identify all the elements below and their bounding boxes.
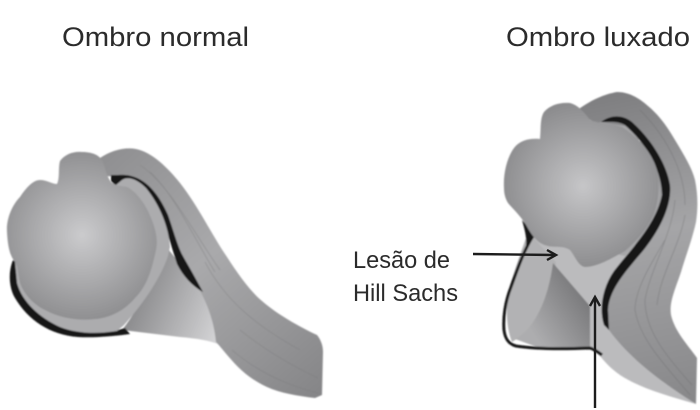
humeral head bbox=[7, 152, 157, 320]
glenoid ring bbox=[15, 178, 170, 333]
scapular wedge bbox=[122, 245, 232, 344]
humeral head bbox=[504, 103, 659, 267]
black outline bbox=[504, 236, 602, 355]
label: Lesão de Hill Sachs: Lesão de bbox=[353, 247, 450, 274]
illustration: normal shoulder bbox=[7, 148, 323, 398]
black joint line, upper bbox=[111, 175, 203, 292]
tendon fibres bbox=[635, 110, 692, 395]
illustration: dislocated shoulder bbox=[504, 92, 697, 404]
label: Lesão de Hill Sachs bbox=[353, 247, 458, 307]
black wedge bbox=[522, 220, 535, 246]
label: Lesão de Hill Sachs: Hill Sachs bbox=[353, 280, 458, 307]
light anterior lobe bbox=[507, 232, 556, 342]
outer tendon band bbox=[575, 92, 697, 404]
black joint line, lower bbox=[10, 260, 130, 337]
black curved line bbox=[601, 116, 670, 330]
head-to-line filler bbox=[600, 122, 660, 256]
heading: Ombro luxado: Ombro luxado bbox=[506, 22, 690, 52]
light capsule area bbox=[530, 225, 696, 404]
heading: Ombro normal: Ombro normal bbox=[62, 22, 249, 52]
arrow: vertical pointer bbox=[590, 297, 600, 408]
arrow: to Hill Sachs lesion bbox=[473, 250, 556, 260]
tendon band bbox=[100, 148, 323, 398]
glenoid wedge bbox=[515, 263, 590, 348]
tendon fibres bbox=[140, 165, 318, 393]
